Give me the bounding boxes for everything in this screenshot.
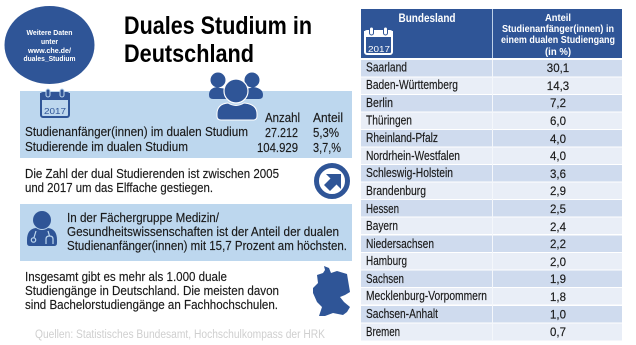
link badge: www.che.de/ <box>27 48 71 55</box>
row: Berlin <box>361 95 622 112</box>
row: Thüringen: Thüringen <box>366 114 412 128</box>
row: Sachsen: Sachsen <box>366 272 404 286</box>
row: Nordrhein-Westfalen <box>361 148 622 164</box>
icon: calendar 2017 white <box>364 27 393 54</box>
icon: map of Germany <box>313 266 350 316</box>
text: Medizin share <box>67 211 347 253</box>
icon: doctor <box>27 211 57 246</box>
row: Schleswig-Holstein: Schleswig-Holstein <box>366 166 453 180</box>
row: Saarland <box>361 60 622 76</box>
text: growth: Die Zahl der dual Studierenden ist zwischen 2005 <box>25 167 279 181</box>
table header: Bundesland <box>398 13 456 25</box>
row: Sachsen-Anhalt <box>361 306 622 322</box>
row: Bayern: Bayern <box>366 219 398 233</box>
row: Brandenburg: 2,9 <box>550 186 566 198</box>
row: Mecklenburg-Vorpommern: Mecklenburg-Vorpommern <box>366 289 487 303</box>
row: Studierende: Studierende im dualen Studium <box>25 140 188 154</box>
text: number of programmes: Studiengänge in Deutschland. Die meisten davon <box>25 284 279 298</box>
row: Schleswig-Holstein: 3,6 <box>550 169 566 181</box>
icon: calendar 2017 <box>40 89 70 117</box>
table header: Studienanfänger(innen) in <box>502 23 614 35</box>
row: Hessen <box>361 200 622 216</box>
title <box>124 12 312 68</box>
link badge: unter <box>41 39 58 46</box>
row: Studienanfänger: 5,3% <box>313 126 339 140</box>
table header: (in %) <box>545 46 571 58</box>
row: Niedersachsen: Niedersachsen <box>366 237 434 251</box>
text: growth: und 2017 um das Elffache gestiegen. <box>25 181 213 195</box>
row: Saarland: 30,1 <box>547 63 569 75</box>
row: Studierende: 104.929 <box>257 141 298 155</box>
row: Saarland: Saarland <box>366 60 407 74</box>
text: number of programmes <box>25 270 279 312</box>
row: Baden-Württemberg: 14,3 <box>547 81 569 93</box>
row: Studierende: 3,7,% <box>313 141 341 155</box>
row: Mecklenburg-Vorpommern: 1,8 <box>550 292 566 304</box>
table header: Anteil <box>545 12 571 24</box>
row: Bayern <box>361 218 622 234</box>
row: Hessen: Hessen <box>366 202 399 216</box>
row: Thüringen: 6,0 <box>550 116 566 128</box>
table: share by federal state <box>361 9 622 340</box>
link badge: duales_Studium <box>24 56 76 63</box>
row: Hessen: 2,5 <box>550 204 566 216</box>
row: Mecklenburg-Vorpommern <box>361 288 622 304</box>
text: number of programmes: sind Bachelorstudiengänge an Fachhochschulen. <box>25 298 278 312</box>
column heading: Anteil: Anteil <box>313 111 343 125</box>
row: Rheinland-Pfalz: 4,0 <box>550 134 566 146</box>
icon: group of people <box>209 72 263 120</box>
row: Hamburg: 2,0 <box>550 257 566 269</box>
column divider <box>492 60 493 340</box>
icon: growth arrow <box>316 166 348 196</box>
column heading: Anzahl: Anzahl <box>265 111 300 125</box>
row: Niedersachsen <box>361 236 622 252</box>
row: Sachsen: 1,9 <box>550 274 566 286</box>
text: number of programmes: Insgesamt gibt es mehr als 1.000 duale <box>25 270 227 284</box>
row: Sachsen-Anhalt: 1,0 <box>550 310 566 322</box>
row: Sachsen-Anhalt: Sachsen-Anhalt <box>366 307 438 321</box>
table header: einem dualen Studiengang <box>501 34 615 46</box>
row: Bremen: 0,7 <box>550 327 566 339</box>
row: Berlin: Berlin <box>366 96 393 110</box>
row: Nordrhein-Westfalen: Nordrhein-Westfalen <box>366 149 460 163</box>
row: Baden-Württemberg <box>361 78 622 94</box>
row: Nordrhein-Westfalen: 4,0 <box>550 151 566 163</box>
text: growth <box>25 167 279 195</box>
row: Rheinland-Pfalz: Rheinland-Pfalz <box>366 131 438 145</box>
row: Brandenburg: Brandenburg <box>366 184 426 198</box>
sources: Quellen: Statistisches Bundesamt, Hochschulkompass der HRK <box>35 329 325 341</box>
row: Thüringen <box>361 112 622 129</box>
icon: calendar 2017 white: 2017 <box>368 45 391 54</box>
row: Sachsen <box>361 270 622 287</box>
text: Medizin share: Studienanfänger(innen) mit 15,7 Prozent am höchsten. <box>67 239 347 253</box>
panel: key figures <box>20 72 352 158</box>
row: Studienanfänger: Studienanfänger(innen) im dualen Studium <box>25 125 248 139</box>
row: Studierende <box>25 140 341 155</box>
row: Hamburg <box>361 253 622 270</box>
title: Duales Studium in <box>124 12 312 40</box>
row: Niedersachsen: 2,2 <box>550 239 566 251</box>
row: Bremen: Bremen <box>366 325 400 339</box>
icon: calendar 2017: 2017 <box>44 107 67 116</box>
row: Berlin: 7,2 <box>550 98 566 110</box>
table header <box>361 9 622 58</box>
text: Medizin share: Gesundheitswissenschaften ist der Anteil der dualen <box>67 225 339 239</box>
row: Bremen <box>361 324 622 340</box>
row: Baden-Württemberg: Baden-Württemberg <box>366 78 458 92</box>
link badge <box>4 6 94 84</box>
link badge: Weitere Daten <box>26 30 72 37</box>
row: Studienanfänger: 27.212 <box>265 126 298 140</box>
row: Hamburg: Hamburg <box>366 254 407 268</box>
row: Brandenburg <box>361 182 622 199</box>
row: Bayern: 2,4 <box>550 222 567 234</box>
row: Schleswig-Holstein <box>361 165 622 182</box>
panel: Medizin <box>20 204 352 261</box>
row: Rheinland-Pfalz <box>361 130 622 146</box>
text: Medizin share: In der Fächergruppe Medizin/ <box>67 211 219 225</box>
title: Deutschland <box>124 40 254 68</box>
